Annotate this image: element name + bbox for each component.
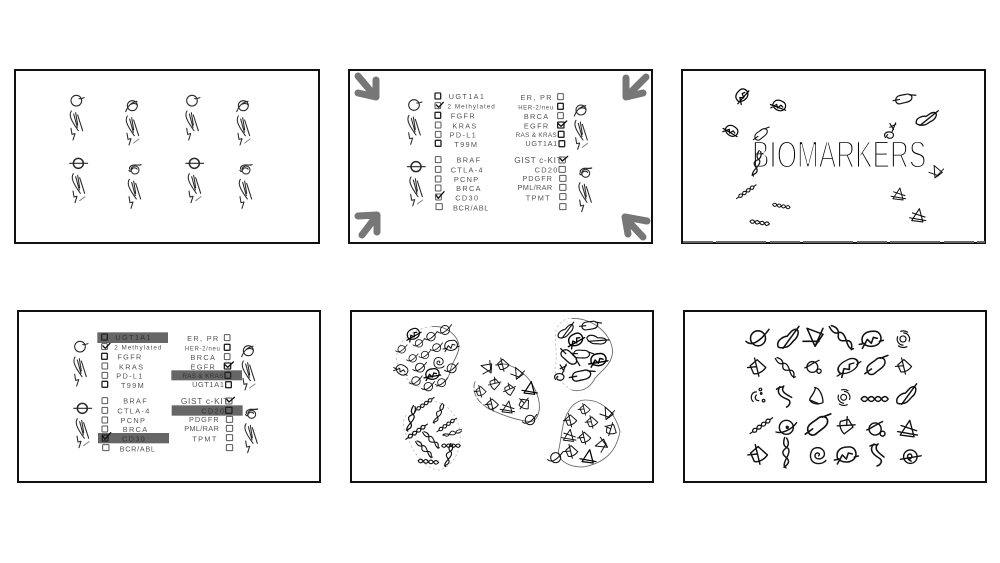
labels (448, 92, 562, 212)
labels: UGT1A1 (115, 333, 152, 342)
labels: HER-2/neu (518, 106, 554, 112)
labels: CD20 (535, 165, 559, 174)
labels: PDGFR (522, 174, 553, 183)
panel 1: patient figures (15, 70, 319, 243)
arrow: top right (626, 77, 646, 97)
labels: BCR/ABL (453, 203, 489, 212)
labels: CD30 (455, 193, 479, 202)
labels: T99M (454, 140, 478, 149)
labels: EGFR (524, 121, 550, 130)
row 2 of glyphs (748, 355, 912, 379)
figure: patient top left (74, 341, 88, 386)
labels: RAS & KRAS (516, 132, 557, 139)
arrow: bottom right (625, 217, 647, 237)
figure: patient 1 (70, 95, 84, 140)
labels: KRAS (452, 121, 478, 130)
labels: BRCA (190, 353, 216, 362)
row 3 of glyphs (751, 384, 917, 408)
figure: patient bottom right (245, 409, 258, 453)
labels: PCNP (454, 175, 480, 184)
row 1 of glyphs (746, 326, 910, 350)
figure: patient top right (574, 105, 588, 149)
cluster: mixed triangles (548, 400, 620, 467)
labels: KRAS (119, 362, 144, 371)
labels: BCR/ABL (120, 444, 156, 453)
labels: CTLA-4 (451, 165, 484, 174)
labels: TPMT (192, 434, 218, 443)
labels (114, 333, 229, 453)
labels: BRCA (456, 184, 482, 193)
figure: patient bottom right (579, 168, 592, 212)
labels: PCNP (120, 416, 146, 425)
panel 3: biomarkers word with glyphs (682, 70, 985, 243)
labels: PML/RAR (184, 424, 219, 433)
row 4 of glyphs (749, 414, 918, 437)
panel 6: biomarker catalogue (684, 311, 986, 482)
cluster: helices (398, 396, 462, 470)
biomarker glyphs (721, 86, 944, 226)
panel 2: patient checklists with arrows (349, 70, 652, 243)
labels: FGFR (117, 352, 143, 361)
labels: EGFR (190, 362, 216, 371)
checkboxes (102, 334, 234, 451)
cluster: triangles (474, 358, 539, 425)
figure: patient bottom left (74, 403, 92, 448)
labels: ER, PR (520, 93, 553, 102)
checkboxes (435, 93, 568, 210)
labels: UGT1A1 (192, 380, 225, 389)
labels: PML/RAR (518, 183, 552, 192)
arrow: bottom left (358, 215, 377, 235)
labels: CD20 (201, 406, 225, 415)
figure: patient 6 (128, 165, 141, 208)
labels: ER, PR (187, 334, 220, 343)
labels: GIST c-KIT (514, 155, 562, 165)
labels: CTLA-4 (117, 406, 151, 415)
labels: GIST c-KIT (181, 396, 229, 406)
figure: patient top right (242, 346, 255, 390)
labels: CD30 (122, 434, 146, 443)
figure: patient 7 (186, 158, 204, 203)
labels: PD-L1 (116, 372, 144, 381)
labels: BRCA (524, 112, 550, 121)
row 5 of glyphs (748, 437, 921, 469)
labels: 2 Methylated (114, 345, 162, 352)
labels: T99M (121, 381, 145, 390)
labels: RAS & KRAS (182, 373, 224, 380)
labels: BRAF (123, 396, 148, 405)
labels: PD-L1 (450, 131, 477, 140)
labels: TPMT (526, 193, 551, 202)
figure: patient 2 (126, 101, 139, 145)
figure: patient 8 (239, 165, 252, 208)
cluster: orbs (392, 325, 459, 391)
figure: patient 5 (70, 158, 88, 203)
figure: patient top left (408, 100, 422, 144)
labels: PDGFR (189, 415, 220, 424)
panel 4: checklists with highlighted rows (18, 311, 320, 482)
labels: BRCA (123, 425, 149, 434)
arrow: top left (358, 76, 376, 97)
labels: UGT1A1 (525, 139, 558, 148)
labels: BRAF (457, 155, 481, 164)
highlight bars (97, 332, 243, 443)
title: BIOMARKERS (752, 134, 926, 176)
figure: patient bottom left (407, 162, 425, 206)
figure: patient 4 (237, 101, 250, 145)
labels: 2 Methylated (448, 104, 496, 111)
labels: FGFR (451, 111, 476, 120)
cluster: beans (555, 314, 613, 391)
checklists (407, 92, 592, 212)
labels: HER-2/neu (185, 347, 220, 353)
panel 5: biomarker clusters (351, 311, 653, 482)
labels: UGT1A1 (449, 92, 485, 101)
figure: patient 3 (186, 95, 200, 140)
